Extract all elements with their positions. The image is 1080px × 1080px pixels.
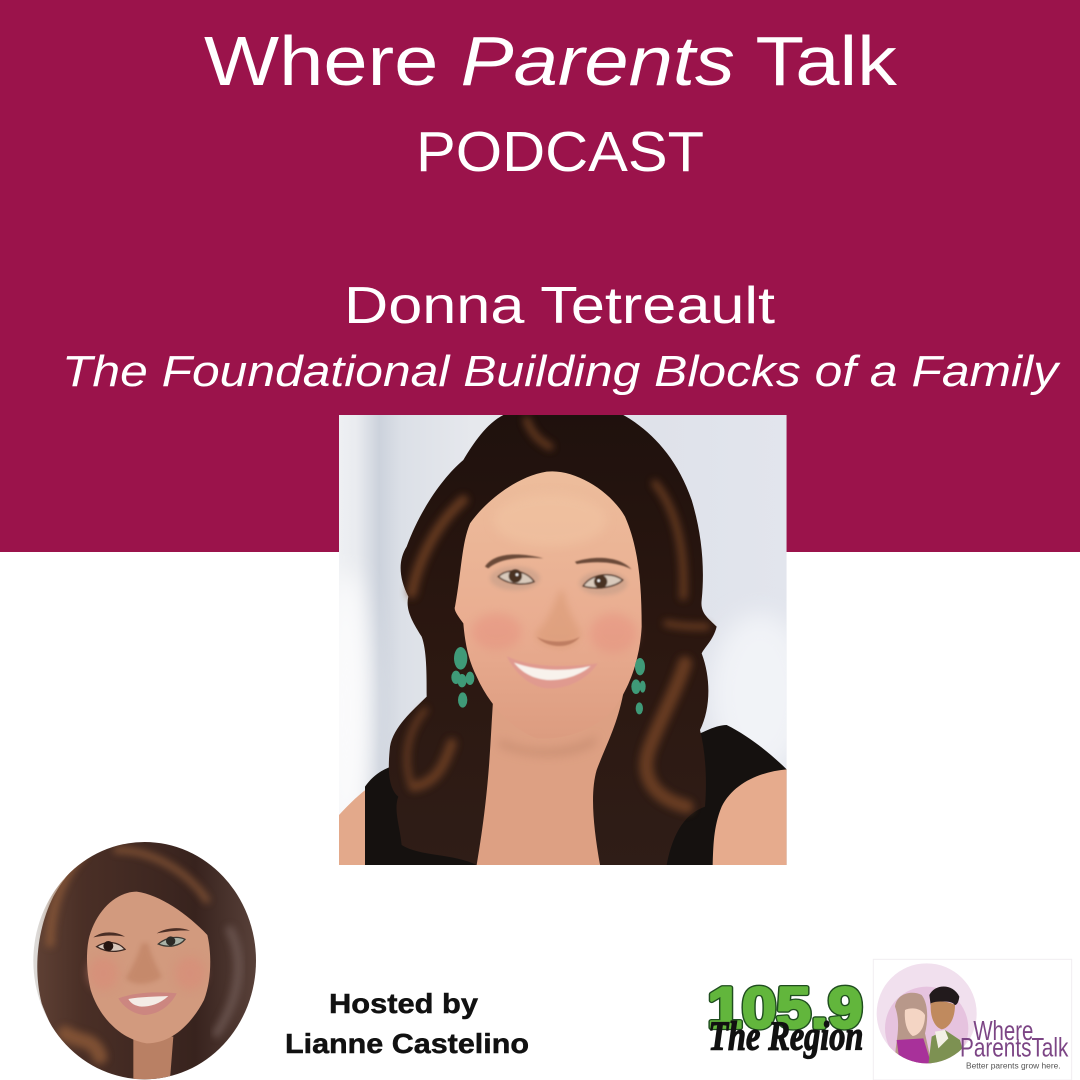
radio station logo: 105.9 — [707, 977, 863, 1041]
host mouth — [118, 992, 177, 1015]
left shoulder — [339, 790, 365, 865]
eyebrows — [485, 555, 543, 568]
mouth — [508, 658, 596, 688]
cheek blush — [474, 614, 520, 648]
radio station logo: 105.9 — [707, 977, 863, 1041]
host hair — [37, 840, 263, 1080]
eye left — [498, 569, 534, 584]
host face — [87, 892, 210, 1043]
radio station logo: The Region — [708, 1013, 863, 1059]
face — [454, 471, 642, 704]
eye shadow — [490, 566, 540, 590]
episode title: The Foundational Building Blocks of a Family — [62, 347, 1061, 396]
guest photo illustration — [323, 414, 810, 865]
earring left — [451, 647, 474, 708]
hair highlights — [407, 420, 707, 807]
guest name: Donna Tetreault — [344, 277, 776, 335]
where parents talk logo: Better parents grow here. — [966, 1060, 1061, 1070]
where parents talk logo — [873, 959, 1072, 1080]
logo man — [929, 986, 959, 1005]
host photo illustration — [32, 840, 263, 1080]
host credit — [285, 988, 529, 1059]
subtitle: podcast: PODCAST — [416, 120, 704, 184]
forehead light — [493, 493, 607, 547]
logo wordmark: Where — [973, 1015, 1033, 1046]
hair — [389, 414, 717, 865]
right shoulder — [713, 769, 787, 865]
host credit: Lianne Castelino — [285, 1028, 529, 1059]
neck and chest — [477, 693, 623, 865]
host eyes — [97, 943, 125, 951]
red garment accent — [57, 1043, 66, 1054]
host credit: Hosted by — [329, 988, 478, 1019]
eye right — [583, 575, 623, 588]
title: Where Parents Talk — [204, 22, 898, 100]
logo woman — [895, 993, 932, 1063]
host nose — [126, 943, 162, 984]
nose — [536, 593, 580, 648]
host neck — [133, 1037, 173, 1079]
earring right — [631, 658, 646, 714]
header band — [0, 0, 1080, 552]
black top — [365, 725, 787, 865]
host eyebrows — [93, 932, 125, 937]
